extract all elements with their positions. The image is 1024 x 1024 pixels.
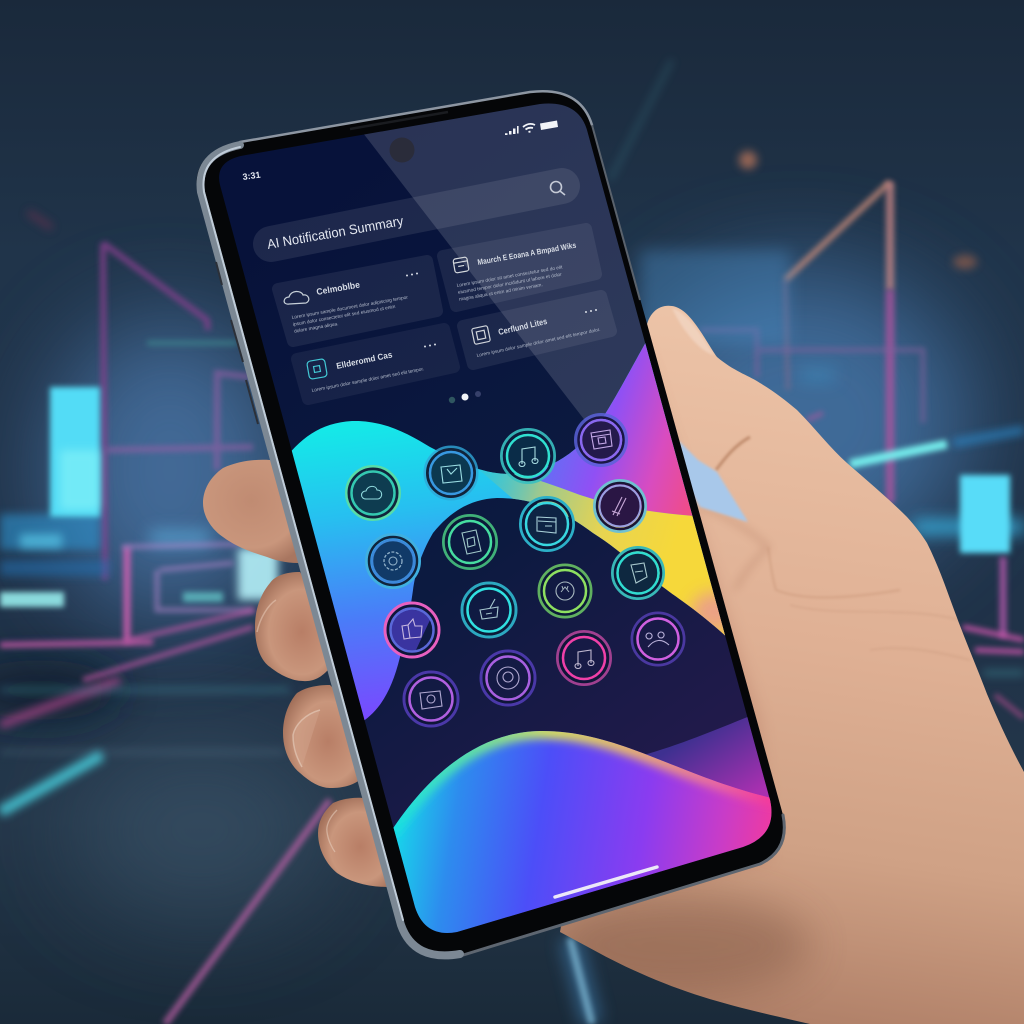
icon: sad group <box>632 613 684 665</box>
icon: id tag <box>612 548 664 598</box>
heading: AI Notification Summary <box>266 213 405 252</box>
icon: calendar window <box>576 415 626 465</box>
search icon <box>550 182 565 195</box>
icon: cloud <box>284 291 309 304</box>
speaker grille <box>350 112 448 129</box>
neon shapes right <box>570 60 1024 1024</box>
icon: thumbs <box>385 603 439 657</box>
card: Maurch: eiusmod tempor dolor incididunt ut labore et dolor <box>458 272 563 296</box>
screen background <box>219 104 772 933</box>
card: Ellderomd: Lorem ipsum dolor sample dolor amet sed elit tempor. <box>311 366 425 394</box>
pager dots <box>449 391 481 403</box>
card: Celmoblbe: dolore magna aliqua. <box>294 321 339 335</box>
glass reflection <box>364 104 646 422</box>
card: Cerflund: Cerflund Lites <box>497 316 548 337</box>
icon: person <box>539 565 591 617</box>
icon: badge square <box>472 326 490 344</box>
icon: chat <box>481 651 535 705</box>
card: Ellderomd <box>297 329 454 399</box>
card: Cerflund <box>463 296 611 364</box>
card: Cerflund: Lorem ipsum dolor sample dolor amet sed elit tempor dolor. <box>476 327 601 359</box>
card: Celmoblbe: Celmoblbe <box>316 279 361 297</box>
icon: square teal <box>307 359 327 379</box>
icon: badge <box>444 516 496 568</box>
card: Maurch <box>443 229 596 306</box>
icon: gear <box>366 534 420 588</box>
upper colour wave <box>292 343 726 720</box>
finger 3 <box>283 685 365 788</box>
hand: palm and thumb <box>550 306 1024 1024</box>
phone body <box>197 91 784 958</box>
icon: cloud <box>346 466 400 520</box>
finger 2 <box>255 572 340 681</box>
card: Celmoblbe: ipsum dolor consectetur elit sed eiusmod ut enim <box>293 304 396 328</box>
icon: bowl <box>462 583 516 637</box>
icon: calendar <box>453 257 469 273</box>
home bar <box>555 867 657 897</box>
card: Maurch: Maurch E Eoana A Bmpad Wiks <box>477 241 577 267</box>
status bar icons <box>505 120 558 135</box>
finger 4 <box>318 798 395 887</box>
card: Maurch: magna aliqua ut enim ad minim veniam. <box>459 282 543 303</box>
screen <box>219 104 772 933</box>
card: Ellderomd: Ellderomd Cas <box>335 349 393 371</box>
lower colour wave <box>394 731 772 933</box>
search bar and title pill <box>271 182 565 244</box>
status bar time: 3:31 <box>242 170 261 182</box>
neon shapes left <box>0 212 330 1024</box>
finger 1 <box>203 460 310 563</box>
card: Celmoblbe <box>278 261 437 341</box>
icon: pen <box>594 480 646 532</box>
icon: music <box>502 430 554 482</box>
icon: camera <box>404 672 458 726</box>
card: Celmoblbe: Lorem ipsum sample document dolor adipiscing tempor <box>291 295 409 321</box>
icon: music pink <box>558 632 610 684</box>
card: Maurch: Lorem ipsum dolor sit amet consectetur sed do elit <box>456 264 564 289</box>
camera <box>390 138 414 162</box>
purple wedge <box>646 717 770 802</box>
icon: calendar check <box>425 447 477 499</box>
card menu <box>406 272 418 276</box>
icon: note <box>520 498 574 550</box>
gap between thumb and fingers <box>678 440 748 522</box>
